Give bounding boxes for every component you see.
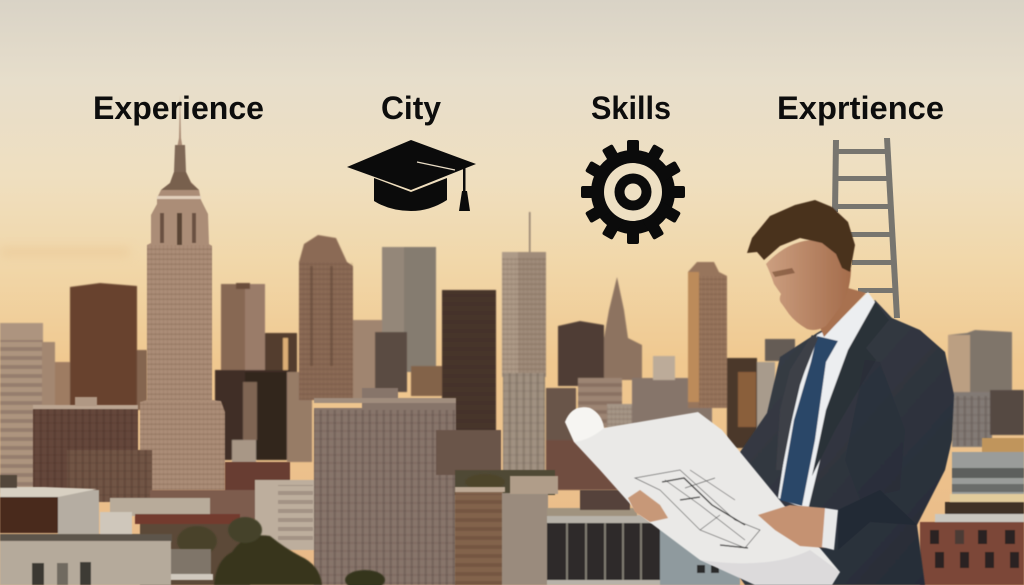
- foreground rooftops: centre: [455, 476, 740, 585]
- lapel: [812, 302, 889, 476]
- tie: [780, 336, 838, 506]
- heading: Exprtience: Exprtience: [777, 90, 944, 126]
- building: Empire State style tower: [140, 95, 225, 490]
- hands: [628, 490, 838, 550]
- icon: gear: [581, 140, 685, 244]
- neck: [818, 288, 866, 337]
- icon: graduation cap: [347, 140, 476, 211]
- trees: [177, 474, 505, 585]
- shirt: [778, 292, 875, 510]
- arm sleeve: [838, 490, 917, 550]
- heading: Skills: Skills: [591, 90, 671, 126]
- foreground rooftops: left: [0, 475, 213, 585]
- foreground rooftops: right: [920, 438, 1024, 585]
- icon: ladder: [832, 138, 900, 318]
- city skyline: distant buildings: [0, 212, 1024, 493]
- man in suit reading blueprint: [700, 200, 954, 585]
- city skyline: mid-ground buildings: [33, 388, 555, 585]
- jacket: [700, 300, 954, 585]
- heading: City: City: [381, 90, 441, 126]
- heading: Experience: Experience: [93, 90, 264, 126]
- blueprint sheet: [565, 407, 840, 585]
- body shadow: [845, 360, 905, 500]
- hair: [747, 200, 855, 272]
- face: [766, 240, 851, 330]
